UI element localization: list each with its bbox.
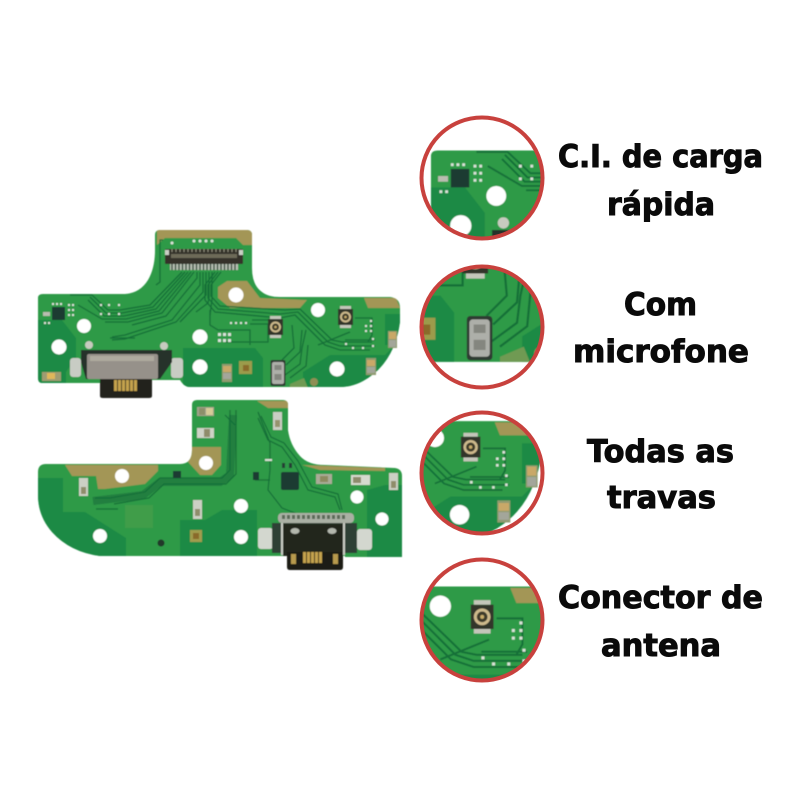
USB-C port <box>258 513 372 570</box>
heading: Com microfone: microfone <box>573 334 749 370</box>
heading: Com microfone: Com <box>624 287 697 323</box>
board: top view <box>38 230 400 398</box>
callout: latches <box>420 410 544 536</box>
traces <box>95 410 342 515</box>
heading: Todas as travas: Todas as <box>587 434 734 470</box>
callout: fast charge IC <box>420 116 544 240</box>
heading: Todas as travas: travas <box>607 480 716 516</box>
heading: C.I. de carga rápida: C.I. de carga <box>558 139 763 175</box>
heading: C.I. de carga rápida: rápida <box>607 187 715 223</box>
heading: Conector de antena: antena <box>601 628 721 664</box>
heading: Todas as travas <box>587 434 734 516</box>
callout: microphone <box>420 264 544 390</box>
trace band <box>93 415 233 501</box>
holes <box>93 456 388 544</box>
callout: antenna connector <box>420 558 544 682</box>
heading: C.I. de carga rápida <box>558 139 763 223</box>
heading: Conector de antena: Conector de <box>558 580 763 616</box>
passive parts <box>197 407 214 416</box>
heading: Com microfone <box>573 287 749 370</box>
board: bottom view <box>38 400 402 570</box>
heading: Conector de antena <box>558 580 763 664</box>
IC <box>281 472 299 490</box>
